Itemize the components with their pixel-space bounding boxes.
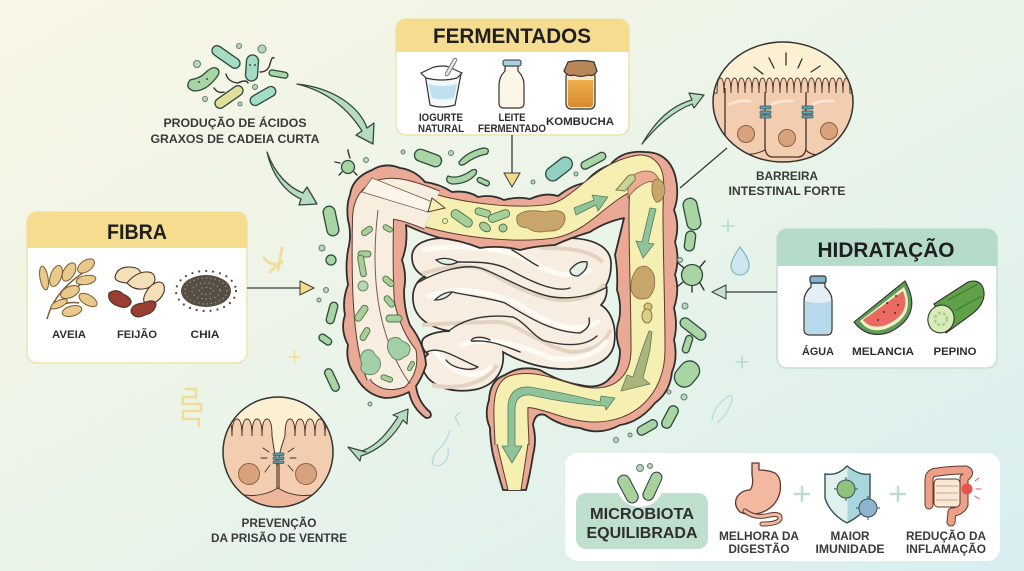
badge: microbiota equilibrada bbox=[576, 493, 708, 549]
labels: benefits: IMUNIDADE bbox=[816, 542, 884, 556]
icon: chia bbox=[176, 271, 236, 311]
arrow: colon to barrier bbox=[642, 93, 704, 144]
icon: balanced bacteria bbox=[616, 459, 664, 507]
labels: hidratacao items bbox=[802, 345, 977, 358]
icon: inflamed intestine bbox=[929, 470, 981, 522]
icon: stomach bbox=[736, 463, 780, 524]
icon: watermelon bbox=[854, 281, 912, 334]
arrow: fermentados to colon bbox=[504, 135, 520, 187]
decorative faint icons bbox=[183, 220, 748, 466]
panel: balanced microbiota benefits bbox=[565, 453, 1000, 561]
badge: microbiota equilibrada: EQUILIBRADA bbox=[586, 525, 698, 542]
heading: fibra: FIBRA bbox=[107, 221, 167, 244]
icon: kombucha bbox=[564, 60, 597, 109]
labels: hidratacao items: ÁGUA bbox=[802, 345, 834, 358]
icon: cucumber bbox=[924, 281, 984, 337]
illustration: prevention detail bbox=[211, 397, 347, 545]
labels: hidratacao items: MELANCIA bbox=[852, 346, 914, 358]
circle: prevention bbox=[222, 397, 335, 512]
flow arrows inside colon bbox=[502, 195, 656, 463]
arrow: bacteria to colon top bbox=[297, 84, 374, 144]
fold at colon corner bbox=[628, 171, 662, 198]
labels: fermentados items: NATURAL bbox=[418, 123, 464, 135]
heading: hidratacao: HIDRATAÇÃO bbox=[818, 239, 954, 262]
bacteria cluster bbox=[188, 44, 288, 110]
labels: fibra items: AVEIA bbox=[52, 329, 86, 341]
labels: fermentados items: IOGURTE bbox=[419, 112, 463, 124]
icon: water bottle bbox=[804, 276, 832, 335]
icon: oats bbox=[38, 256, 99, 319]
labels: benefits: MELHORA DA bbox=[719, 529, 799, 543]
bacteria inside colon bbox=[353, 175, 652, 383]
labels: benefits: REDUÇÃO DA bbox=[906, 528, 986, 543]
labels: fibra items: FEIJÃO bbox=[117, 328, 157, 341]
labels: fermentados items bbox=[418, 112, 614, 135]
colon lumen: ascending bbox=[373, 199, 432, 372]
text: prevention bbox=[211, 515, 347, 545]
panel: hidratacao bbox=[777, 229, 997, 368]
text: fatty acids: GRAXOS DE CADEIA CURTA bbox=[150, 132, 320, 146]
labels: benefits: INFLAMAÇÃO bbox=[906, 541, 986, 556]
intestine folds bbox=[417, 250, 607, 369]
icon: beans bbox=[109, 267, 164, 317]
text: strong barrier: BARREIRA bbox=[756, 169, 818, 183]
panel: fibra bbox=[27, 212, 247, 363]
small intestine bbox=[412, 237, 615, 391]
arrow: bacteria to colon side bbox=[267, 152, 317, 205]
plus signs bbox=[795, 487, 905, 501]
labels: benefits bbox=[719, 528, 986, 556]
labels: fermentados items: KOMBUCHA bbox=[546, 116, 614, 128]
text: strong barrier: INTESTINAL FORTE bbox=[728, 184, 846, 198]
heading: fermentados: FERMENTADOS bbox=[433, 25, 591, 48]
icon: water drop bbox=[731, 247, 749, 275]
labels: fibra items: CHIA bbox=[190, 329, 220, 341]
circle: strong barrier bbox=[713, 42, 857, 170]
illustration: barrier detail bbox=[713, 42, 857, 198]
panel: bacteria and short-chain fatty acids bbox=[150, 44, 320, 146]
labels: fibra items bbox=[52, 328, 220, 341]
colon outer wall bbox=[343, 152, 678, 490]
text: prevention: DA PRISÃO DE VENTRE bbox=[211, 530, 347, 545]
icon: yogurt bbox=[421, 60, 462, 107]
stool bbox=[517, 179, 665, 299]
labels: fermentados items: LEITE bbox=[498, 112, 526, 124]
arrow: fibra to colon bbox=[247, 281, 314, 295]
connector: colon to barrier bbox=[680, 148, 727, 188]
panel: fermentados bbox=[396, 19, 629, 135]
icon: shield bbox=[825, 466, 880, 523]
colon lumen: transverse and descending bbox=[428, 172, 648, 445]
arrow: hidratacao to colon bbox=[712, 285, 777, 299]
labels: benefits: DIGESTÃO bbox=[728, 541, 790, 556]
text: strong barrier bbox=[728, 169, 846, 198]
text: prevention: PREVENÇÃO bbox=[242, 515, 316, 530]
large intestine bbox=[343, 152, 678, 490]
text: fatty acids bbox=[150, 115, 320, 146]
text: fatty acids: PRODUÇÃO DE ÁCIDOS bbox=[164, 115, 306, 130]
labels: fermentados items: FERMENTADO bbox=[478, 123, 546, 135]
arrow: double-headed prevention to colon bbox=[348, 409, 408, 461]
outer bacteria around colon bbox=[317, 148, 708, 443]
icon: fermented milk bbox=[499, 60, 524, 108]
labels: benefits: MAIOR bbox=[830, 529, 870, 543]
badge: microbiota equilibrada: MICROBIOTA bbox=[590, 506, 694, 523]
labels: hidratacao items: PEPINO bbox=[934, 346, 977, 358]
